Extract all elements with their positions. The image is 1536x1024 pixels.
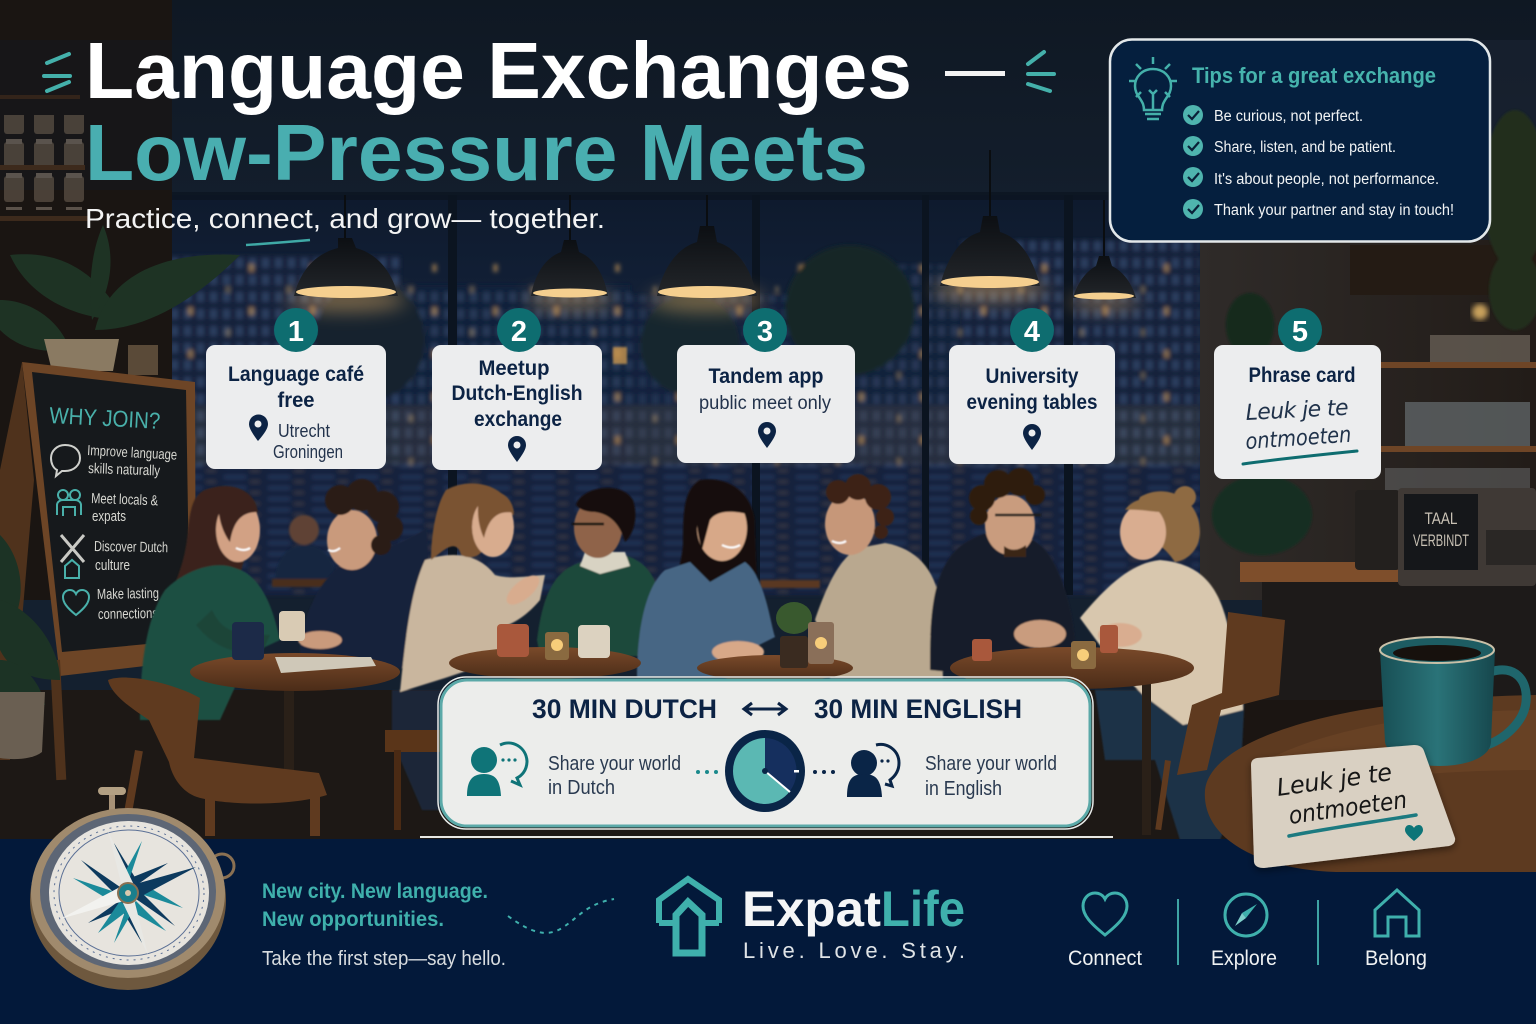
- person 8: woman in cream sweater: [1080, 486, 1245, 840]
- person 1: woman in green sweater: [140, 486, 280, 720]
- chalkboard: why join: Meet locals &: [91, 491, 159, 509]
- logo: ExpatLife: Life: [881, 881, 965, 937]
- dutch heading: 30 MIN DUTCH: [532, 694, 717, 724]
- card 4: university tables: [949, 308, 1115, 464]
- subtitle: [85, 203, 605, 245]
- english share text: in English: [925, 778, 1002, 800]
- arrow: two way: [744, 703, 786, 715]
- decorative sparks: [44, 52, 1054, 91]
- wooden chairs: [108, 612, 1285, 836]
- person 7: man in black hoodie: [930, 468, 1075, 675]
- value: belong: Belong: [1365, 947, 1427, 970]
- espresso machine with TAAL VERBINDT sign: VERBINDT: [1413, 531, 1469, 550]
- background patron: [272, 515, 820, 588]
- right wall, shelves and coffee bar: [1200, 40, 1536, 840]
- card 3: tandem app: 3: [757, 316, 773, 348]
- subtitle: Practice, connect, and grow— together.: [85, 203, 605, 234]
- value: belong: [1365, 890, 1427, 970]
- person 2: man in navy hoodie: [298, 479, 432, 668]
- panel: 30 minutes exchange: [438, 677, 1093, 829]
- logo: ExpatLife: Expat: [742, 881, 881, 937]
- plant lower left: [0, 535, 60, 759]
- coaster with handwritten phrase: ontmoeten: [1287, 786, 1409, 830]
- person 5: woman in denim shirt: [637, 479, 775, 677]
- dutch share text: in Dutch: [548, 777, 615, 799]
- title line one: Language Exchanges: [85, 26, 912, 115]
- tip texts: Thank your partner and stay in touch!: [1214, 202, 1454, 219]
- icon: windmill: [61, 535, 84, 578]
- icon: house logo: [659, 879, 719, 953]
- card 2: meetup: [432, 308, 602, 470]
- chalkboard: why join: culture: [95, 558, 130, 574]
- footer tagline: [262, 880, 506, 970]
- dutch share text: Share your world: [548, 753, 681, 775]
- dutch share text: [548, 753, 681, 799]
- english share text: [925, 753, 1057, 800]
- chalkboard: why join: skills naturally: [88, 461, 161, 480]
- footer band: [0, 839, 1536, 1024]
- title: [44, 26, 1054, 197]
- chalkboard: why join: connections: [98, 606, 158, 623]
- card 5: phrase card: Phrase card: [1248, 364, 1356, 387]
- compass rose: [60, 831, 196, 955]
- icon: chat: [51, 445, 80, 476]
- logo: ExpatLife: [659, 879, 965, 963]
- person 4: man in green sweater: [537, 488, 660, 656]
- foreground table with mug and coaster: [1205, 637, 1536, 872]
- dots: [696, 770, 718, 774]
- card 1: language cafe: Utrecht: [278, 421, 330, 441]
- title line two: Low-Pressure Meets: [85, 108, 868, 197]
- icon: english speaker: [847, 744, 899, 797]
- hanging lamps: [286, 150, 1140, 364]
- value: connect: Connect: [1068, 947, 1142, 970]
- chalkboard: why join: Make lasting: [97, 586, 159, 603]
- icon: compass: [30, 787, 234, 990]
- plant right: [1212, 110, 1536, 555]
- footer tagline: Take the first step—say hello.: [262, 948, 506, 970]
- card 1: language cafe: free: [278, 389, 314, 412]
- person 3: woman in beige sweater: [392, 483, 545, 810]
- floor: [0, 690, 1240, 840]
- card 5: phrase card: [1214, 308, 1381, 479]
- chalkboard: why join: expats: [92, 509, 126, 525]
- card 3: tandem app: Tandem app: [708, 365, 824, 388]
- tips heading: Tips for a great exchange: [1192, 63, 1436, 88]
- footer divider line: [420, 836, 1113, 838]
- mug: [1380, 637, 1526, 766]
- cafe tables with cups and candles: [190, 602, 1194, 835]
- value: explore: Explore: [1211, 947, 1277, 970]
- card 4: university tables: 4: [1024, 316, 1040, 348]
- card 3: tandem app: [677, 308, 855, 463]
- panel: tips: [1110, 40, 1490, 242]
- coaster with handwritten phrase: Leuk je te: [1275, 758, 1394, 802]
- card 2: meetup: 2: [511, 316, 527, 348]
- plants upper left: [0, 225, 240, 375]
- value: connect: [1068, 893, 1142, 970]
- tip texts: Be curious, not perfect.: [1214, 108, 1363, 125]
- card 1: language cafe: Groningen: [273, 442, 343, 462]
- card 4: university tables: University: [986, 365, 1079, 388]
- card 2: meetup: exchange: [474, 408, 562, 431]
- card 4: university tables: evening tables: [966, 391, 1098, 414]
- card 1: language cafe: [206, 308, 386, 469]
- icon: light bulb: [1129, 57, 1177, 119]
- tip texts: [1214, 108, 1454, 219]
- coaster with handwritten phrase: [1251, 745, 1455, 868]
- card 2: meetup: Meetup: [478, 357, 550, 380]
- icon: clock: [725, 730, 805, 812]
- icon: people: [57, 490, 81, 516]
- english heading: 30 MIN ENGLISH: [814, 694, 1022, 724]
- card 2: meetup: Dutch-English: [452, 382, 582, 405]
- card 5: phrase card: 5: [1292, 316, 1308, 348]
- card 1: language cafe: Language café: [228, 363, 364, 386]
- window with city at dusk: [0, 192, 1210, 595]
- dashed path: [508, 899, 614, 933]
- value: explore: [1211, 894, 1277, 970]
- icon: dutch speaker: [467, 743, 527, 796]
- dots: [813, 770, 835, 774]
- english share text: Share your world: [925, 753, 1057, 775]
- left wall and shelves: [0, 0, 172, 600]
- espresso machine with TAAL VERBINDT sign: TAAL: [1424, 509, 1458, 528]
- icon: heart: [63, 590, 89, 615]
- espresso machine with TAAL VERBINDT sign: [1355, 488, 1536, 586]
- chalkboard: why join: WHY JOIN?: [49, 402, 161, 434]
- footer tagline: New city. New language.: [262, 880, 488, 903]
- chalkboard: why join: Discover Dutch: [94, 539, 168, 556]
- card 5: phrase card: ontmoeten: [1245, 423, 1352, 455]
- person 6: man in beige sweater: [815, 474, 943, 678]
- people at the tables: [140, 468, 1245, 840]
- chalkboard: why join: [0, 362, 196, 780]
- tip texts: Share, listen, and be patient.: [1214, 139, 1396, 156]
- card 1: language cafe: 1: [288, 316, 304, 348]
- card 5: phrase card: Leuk je te: [1245, 396, 1349, 426]
- tip checks: [1183, 105, 1203, 219]
- card 3: tandem app: public meet only: [699, 393, 831, 414]
- logo: ExpatLife: Live. Love. Stay.: [743, 938, 965, 963]
- tip texts: It's about people, not performance.: [1214, 171, 1439, 188]
- footer tagline: New opportunities.: [262, 908, 444, 931]
- chalkboard: why join: Improve language: [87, 443, 178, 464]
